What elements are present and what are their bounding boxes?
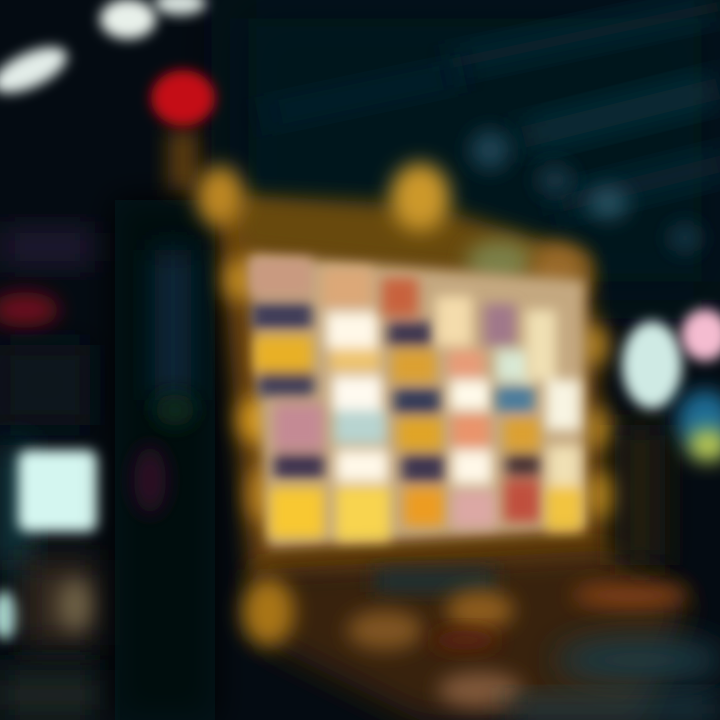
right neighbouring machine — [615, 309, 720, 565]
machine dark side column — [115, 200, 215, 720]
reel 5 — [484, 304, 540, 522]
reel 2 — [322, 268, 390, 542]
ceiling lights top left — [0, 0, 206, 102]
ceiling with teal streaks — [230, 0, 720, 300]
red beacon — [151, 70, 215, 190]
reels screen — [250, 255, 585, 548]
lower control deck — [242, 550, 720, 720]
left wall signage — [0, 232, 95, 425]
reel 6 — [526, 310, 582, 532]
reel 4 — [436, 296, 496, 528]
gold cabinet frame — [196, 163, 620, 590]
left glowing screen — [0, 445, 100, 720]
reel 3 — [382, 278, 444, 526]
reel 1 — [250, 258, 324, 538]
